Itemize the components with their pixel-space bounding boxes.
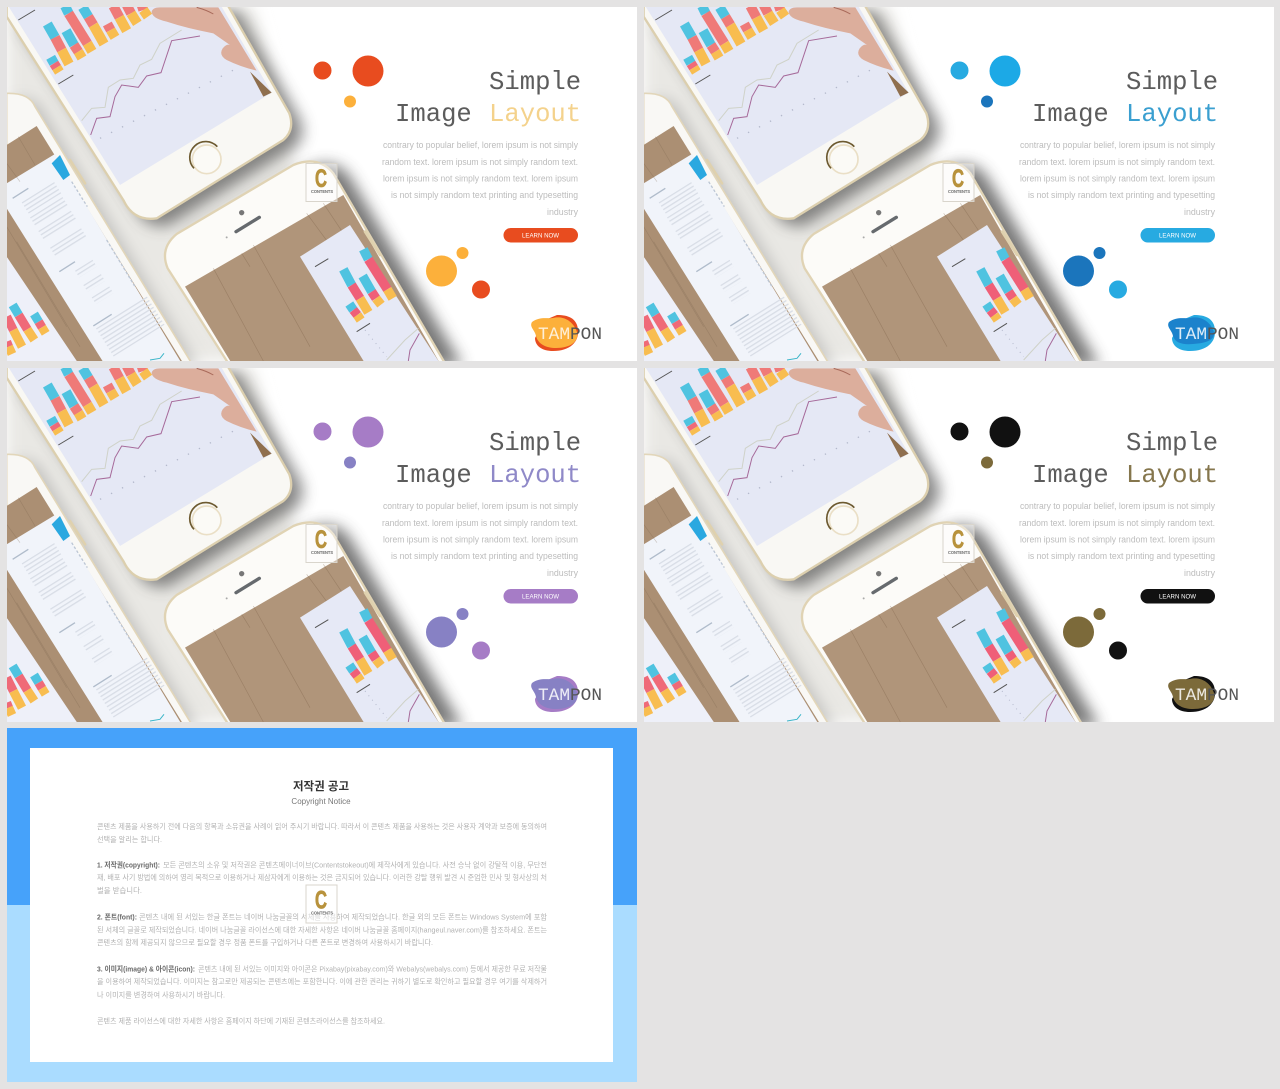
section: copyright: 1. 저작권(copyright):	[97, 860, 160, 870]
logo	[1168, 676, 1239, 712]
slide 2: blue theme	[644, 3, 1274, 368]
section: image and icon	[97, 964, 547, 1000]
panel: copyright notice	[7, 728, 637, 1082]
body text: contrary to popular belief, lorem ipsum is not simply	[1020, 140, 1216, 150]
phone photo collage	[7, 3, 637, 368]
section: copyright: 재, 배포 사기 방법에 의하여 영리 목적으로 이용하거나 제삼자에게 이용하는 것은 금지되어 있습니다. 이러한 강탈 행위 발견 시 준엄한 민사 및 형사상의 처	[97, 872, 547, 882]
title: Image	[395, 100, 472, 129]
body text: random text. lorem ipsum is not simply random text.	[382, 157, 578, 167]
title: Layout	[489, 100, 581, 129]
top decorative dots	[314, 56, 384, 108]
body text: is not simply random text printing and typesetting	[1028, 551, 1215, 561]
closing line: 콘텐츠 제품 라이선스에 대한 자세한 사항은 홈페이지 하단에 기재된 콘텐츠라이선스를 참조하세요.	[97, 1016, 385, 1026]
body text: contrary to popular belief, lorem ipsum is not simply	[383, 140, 579, 150]
body text: lorem ipsum is not simply random text. lorem ipsum	[383, 174, 578, 184]
button: LEARN NOW	[1159, 594, 1196, 600]
heading: 저작권 공고	[293, 779, 349, 793]
logo: PON	[1207, 325, 1239, 345]
body text: random text. lorem ipsum is not simply random text.	[1019, 518, 1215, 528]
intro paragraph: 선택을 알리는 합니다.	[97, 834, 162, 844]
body text	[382, 140, 579, 217]
watermark badge: C	[952, 165, 964, 193]
body text: contrary to popular belief, lorem ipsum is not simply	[1020, 501, 1216, 511]
body text: lorem ipsum is not simply random text. lorem ipsum	[1020, 174, 1215, 184]
title: Image	[1032, 100, 1109, 129]
slide 3: purple theme	[7, 364, 637, 729]
top decorative dots	[950, 416, 1020, 468]
title: Layout	[489, 461, 581, 490]
body text: is not simply random text printing and typesetting	[1028, 190, 1215, 200]
section: copyright: 벌을 받습니다.	[97, 885, 142, 895]
section: font	[97, 912, 547, 947]
logo: TAM	[538, 325, 570, 345]
body text: industry	[1184, 207, 1216, 217]
body text: is not simply random text printing and typesetting	[391, 551, 578, 561]
button	[504, 228, 578, 242]
watermark badge: CONTENTS	[948, 189, 970, 194]
title: Simple	[489, 429, 581, 458]
logo	[531, 676, 602, 712]
logo: PON	[570, 686, 602, 706]
watermark badge: C	[952, 526, 964, 554]
body text	[1019, 140, 1216, 217]
body text: industry	[547, 568, 579, 578]
watermark badge	[306, 524, 337, 562]
button	[1140, 589, 1215, 604]
blue background upper	[7, 728, 637, 905]
intro paragraph	[97, 821, 547, 844]
body text	[382, 501, 579, 578]
button: LEARN NOW	[1159, 234, 1196, 240]
title	[1032, 68, 1218, 129]
section: image and icon: 콘텐츠 내에 된 서있는 이미지와 아이콘은 Pixabay(pixabay.com)와 Webalys(webalys.com) 등에서 제공한 무료 저작물	[198, 964, 547, 974]
body text: lorem ipsum is not simply random text. lorem ipsum	[1020, 534, 1215, 544]
bottom decorative dots	[426, 608, 490, 660]
logo: PON	[1207, 686, 1239, 706]
watermark badge: CONTENTS	[311, 189, 333, 194]
phone photo collage	[644, 364, 1274, 729]
logo	[1168, 315, 1239, 351]
body text: is not simply random text printing and typesetting	[391, 190, 578, 200]
button	[504, 589, 578, 604]
bottom decorative dots	[1063, 247, 1127, 298]
blue background lower	[7, 905, 637, 1082]
body text: industry	[1184, 568, 1216, 578]
body text: contrary to popular belief, lorem ipsum is not simply	[383, 501, 579, 511]
slide 1: orange theme	[7, 3, 637, 368]
section: copyright: 모든 콘텐츠의 소유 및 저작권은 콘텐츠메이너이브(Contentstokeout)에 제작사에게 있습니다. 사전 승낙 없이 강탈적 이용, 무단전	[163, 860, 547, 870]
watermark badge	[943, 524, 974, 562]
title	[1032, 429, 1218, 490]
watermark badge: C	[315, 165, 327, 193]
title: Simple	[1126, 429, 1218, 458]
body text	[1019, 501, 1216, 578]
logo	[531, 315, 602, 351]
bottom decorative dots	[1063, 608, 1127, 660]
body text: industry	[547, 207, 579, 217]
section: copyright	[97, 860, 547, 895]
section: font: 2. 폰트(font):	[97, 912, 137, 922]
section: image and icon: 3. 이미지(image) & 아이콘(icon):	[97, 964, 195, 974]
section: font: 콘텐츠 내에 된 서있는 한글 폰트는 네이버 나눔글꼴의 서체를 사용하여 제작되었습니다. 한글 외의 모든 폰트는 Windows System에 포함	[139, 912, 547, 922]
logo: PON	[570, 325, 602, 345]
section: font: 콘텐츠의 함께 제공되지 않으므로 필요할 경우 정품 폰트를 구입하거나 다른 폰트로 변경하여 사용하시기 바랍니다.	[97, 937, 433, 947]
title: Simple	[1126, 68, 1218, 97]
watermark badge: CONTENTS	[311, 910, 333, 916]
title: Layout	[1126, 461, 1218, 490]
bottom decorative dots	[426, 247, 490, 298]
button: LEARN NOW	[522, 234, 559, 240]
watermark badge: CONTENTS	[948, 550, 970, 555]
phone photo collage	[644, 3, 1274, 368]
title: Simple	[489, 68, 581, 97]
body text: random text. lorem ipsum is not simply random text.	[1019, 157, 1215, 167]
button: LEARN NOW	[522, 594, 559, 600]
watermark badge: C	[315, 526, 327, 554]
top decorative dots	[314, 416, 384, 468]
button	[1140, 228, 1215, 242]
body text: random text. lorem ipsum is not simply random text.	[382, 518, 578, 528]
body text: lorem ipsum is not simply random text. lorem ipsum	[383, 534, 578, 544]
title: Layout	[1126, 100, 1218, 129]
intro paragraph: 콘텐츠 제품을 사용하기 전에 다음의 항목과 소유권을 사례이 읽어 주시기 바랍니다. 따라서 이 콘텐츠 제품을 사용하는 것은 사용자 계약과 보증에 동의하여	[97, 821, 547, 831]
phone photo collage	[7, 364, 637, 729]
white card	[30, 748, 613, 1062]
watermark badge	[943, 164, 974, 202]
top decorative dots	[950, 56, 1020, 108]
title: Image	[1032, 461, 1109, 490]
logo: TAM	[538, 686, 570, 706]
watermark badge: C	[315, 886, 327, 914]
title: Image	[395, 461, 472, 490]
title	[395, 429, 581, 490]
section: image and icon: 나 이미지를 변경하여 사용하시기 바랍니다.	[97, 990, 225, 1000]
subheading: Copyright Notice	[291, 797, 351, 806]
logo: TAM	[1175, 686, 1207, 706]
watermark badge	[306, 885, 337, 923]
watermark badge: CONTENTS	[311, 550, 333, 555]
section: image and icon: 을 이용하여 제작되었습니다. 이미지는 참고로만 제공되는 콘텐츠에는 포함한니다. 이에 관한 권리는 귀하기 별도로 확인하고 필요할 경우 여기를 삭제하거	[97, 976, 547, 986]
logo: TAM	[1175, 325, 1207, 345]
watermark badge	[306, 164, 337, 202]
slide 4: black and olive theme	[644, 364, 1274, 729]
title	[395, 68, 581, 129]
section: font: 된 서체의 글꼴로 제작되었습니다. 네이버 나눔글꼴 라이선스에 대한 자세한 사항은 네이버 나눔글꼴 홈페이지(hangeul.naver.com)를 참조하세요. 폰트는	[97, 924, 547, 934]
